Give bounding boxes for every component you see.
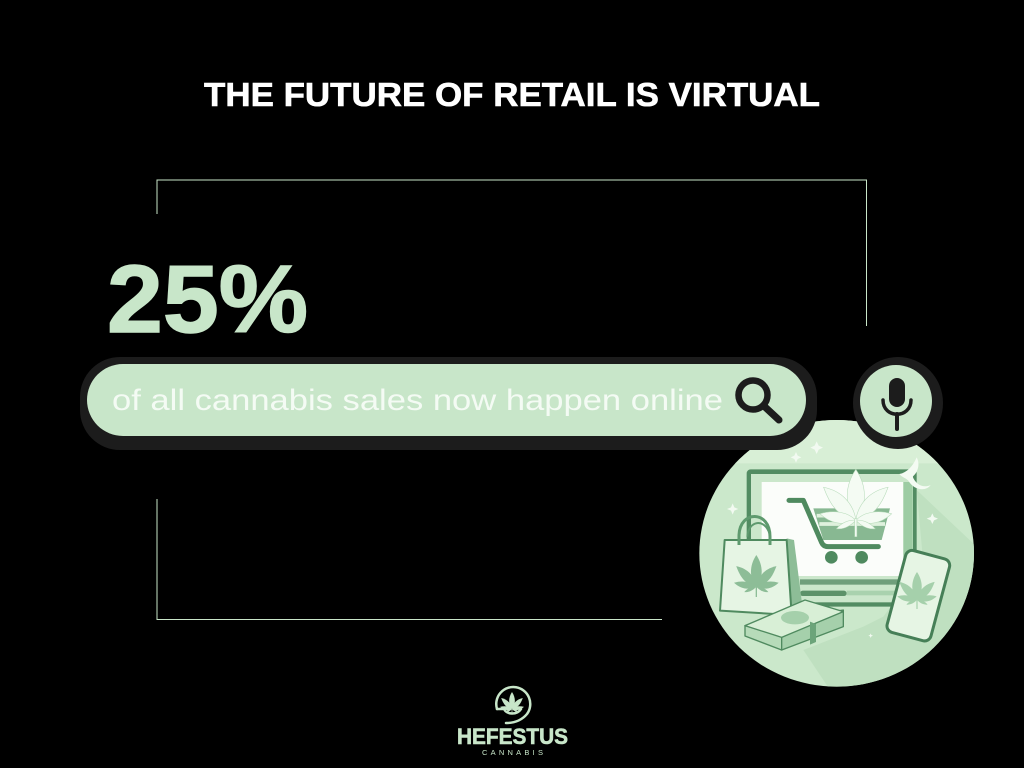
illustration: online cannabis shopping — [699, 420, 974, 687]
icon: magnifying glass — [738, 380, 779, 420]
frame outline — [157, 180, 866, 620]
logo wordmark: HEFESTUS — [457, 724, 568, 749]
title: THE FUTURE OF RETAIL IS VIRTUAL — [204, 76, 820, 113]
icon: bag cannabis leaf — [734, 555, 779, 597]
logo: Hefestus Cannabis — [457, 687, 568, 757]
sparkles — [727, 441, 938, 638]
stack of money — [745, 600, 843, 650]
shopping bag — [720, 516, 802, 615]
search bar — [80, 357, 817, 450]
icon: clouds — [899, 457, 931, 489]
logo emblem — [496, 687, 530, 723]
illustration background circle — [699, 420, 974, 687]
shopping cart — [789, 500, 890, 564]
logo subtitle: CANNABIS — [482, 748, 543, 757]
microphone button — [853, 357, 943, 449]
search bar shadow — [80, 357, 817, 450]
icon: phone cannabis leaf — [897, 572, 937, 609]
smartphone — [885, 549, 951, 642]
search bar text: of all cannabis sales now happen online — [112, 384, 723, 417]
microphone button shadow — [853, 357, 943, 449]
icon: large cannabis leaf — [820, 469, 892, 537]
statistic: 25%: 25% — [107, 246, 308, 353]
microphone button fill — [860, 365, 932, 437]
search bar fill — [87, 364, 806, 436]
monitor — [747, 469, 917, 607]
icon: microphone — [883, 378, 911, 429]
